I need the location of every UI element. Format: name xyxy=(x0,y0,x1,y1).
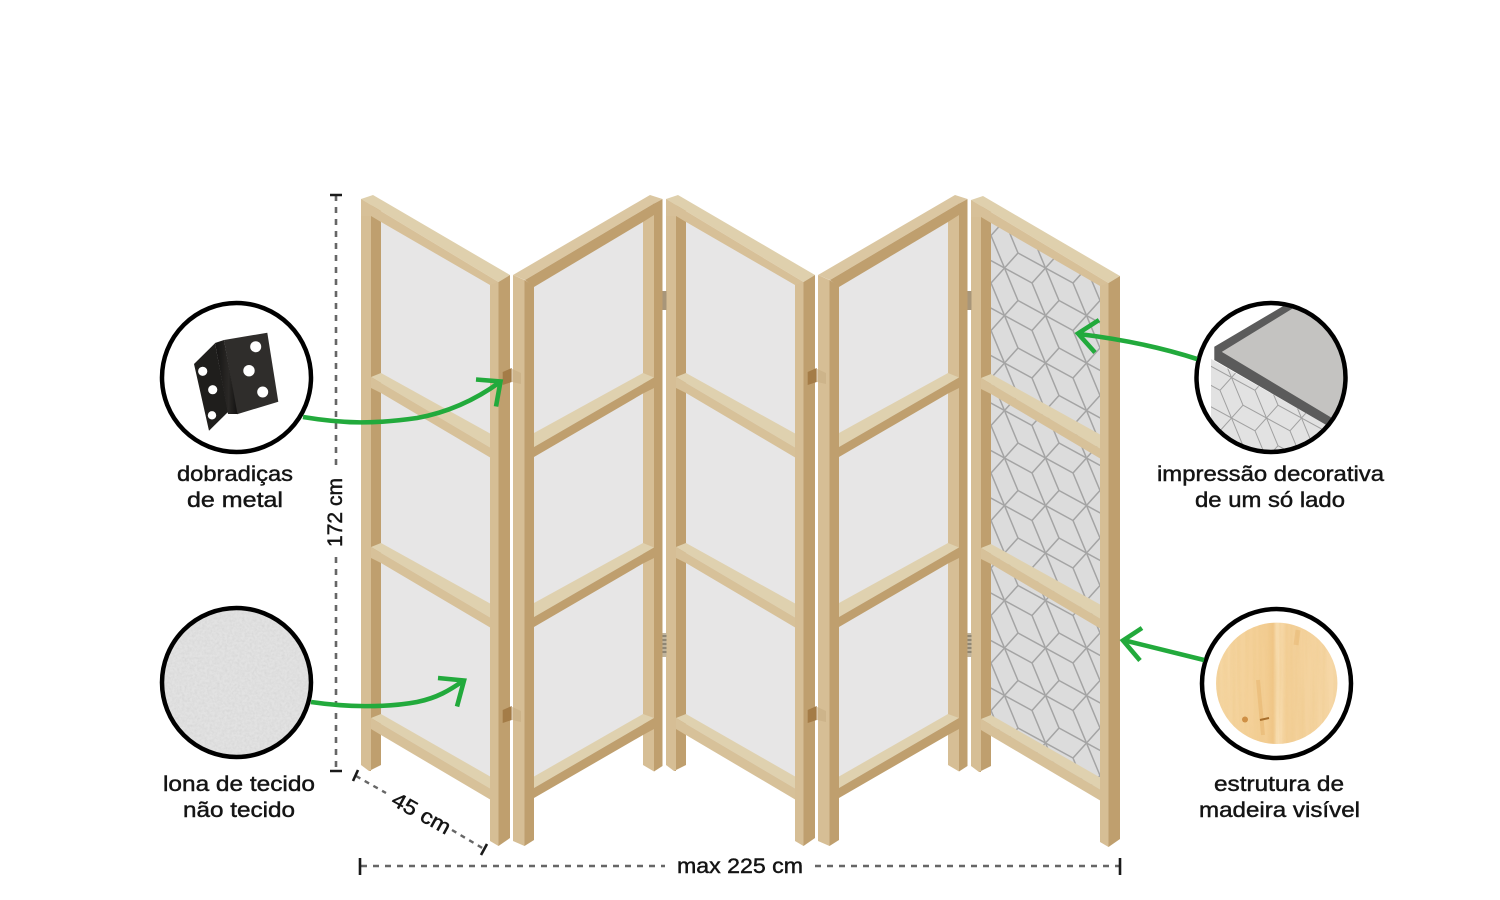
label: metal hinges: dobradiças xyxy=(177,463,293,486)
wooden hinges between panels xyxy=(503,291,972,723)
arrow: hinge xyxy=(303,380,500,422)
panel 2 of folding screen xyxy=(513,195,662,846)
label: one-sided decorative print: impressão decorativa xyxy=(1157,463,1384,486)
label: one-sided decorative print xyxy=(1157,463,1384,512)
panel 3 of folding screen xyxy=(666,195,815,846)
dimension: depth 45 cm: 45 cm xyxy=(388,788,455,839)
label: non-woven canvas: não tecido xyxy=(183,799,295,822)
dimension: height 172 cm xyxy=(324,195,347,771)
panel 5 of folding screen with printed pattern xyxy=(971,196,1120,847)
label: visible wood structure: madeira visível xyxy=(1199,799,1360,822)
dimension: width max 225 cm xyxy=(360,855,1120,878)
arrow: print xyxy=(1078,320,1197,359)
arrow: fabric xyxy=(311,678,464,706)
label: visible wood structure xyxy=(1199,773,1360,822)
dimension: width max 225 cm: max 225 cm xyxy=(677,855,803,878)
dimension: height 172 cm: 172 cm xyxy=(324,478,347,547)
label: metal hinges xyxy=(177,463,293,512)
panel 4 of folding screen xyxy=(818,195,968,846)
arrow: wood frame xyxy=(1123,628,1204,660)
icon: non-woven fabric callout xyxy=(160,606,314,760)
label: non-woven canvas xyxy=(163,773,315,822)
panel 1 of folding screen xyxy=(361,195,510,846)
label: metal hinges: de metal xyxy=(187,489,283,512)
icon: visible wood frame callout xyxy=(1202,609,1351,758)
label: one-sided decorative print: de um só lado xyxy=(1195,489,1345,512)
icon: one-sided print callout xyxy=(1196,300,1350,456)
label: non-woven canvas: lona de tecido xyxy=(163,773,315,796)
icon: metal hinge callout xyxy=(162,303,311,452)
dimension: depth 45 cm xyxy=(353,770,487,855)
label: visible wood structure: estrutura de xyxy=(1214,773,1344,796)
